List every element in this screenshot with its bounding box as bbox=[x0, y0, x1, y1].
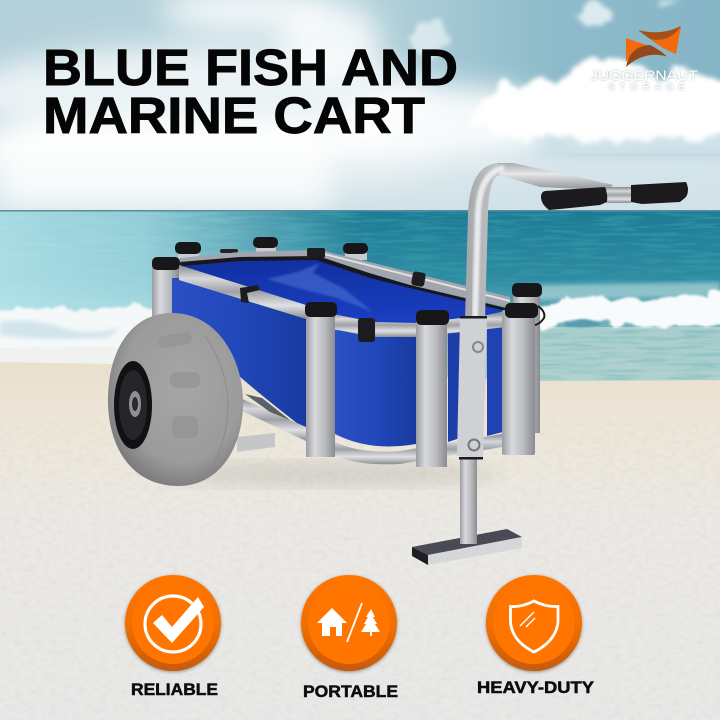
lower chassis and left foot bbox=[237, 394, 306, 452]
badge: shield icon bbox=[486, 575, 582, 671]
wheel bbox=[108, 313, 243, 486]
feature: heavy-duty bbox=[477, 575, 594, 697]
height post and T foot bbox=[412, 316, 522, 565]
badge: house and tree icon bbox=[301, 575, 397, 671]
logo wordmark: JUGGERNAUT bbox=[590, 67, 698, 83]
logo wordmark bbox=[590, 67, 698, 93]
back rim rail bbox=[180, 250, 510, 308]
badge: reliable check icon bbox=[125, 575, 221, 671]
sand bbox=[0, 362, 720, 720]
top front rail bbox=[179, 248, 506, 342]
sky with clouds bbox=[0, 0, 720, 212]
basket interior bbox=[180, 256, 510, 324]
bottom front rim bbox=[335, 434, 502, 464]
logo mark bbox=[626, 26, 681, 67]
logo: Juggernaut Storage bbox=[590, 26, 698, 93]
interior fabric fold bbox=[267, 263, 373, 312]
cart shadow on sand bbox=[160, 461, 500, 487]
front rod holders bbox=[305, 302, 544, 467]
logo wordmark: STORAGE bbox=[608, 82, 685, 93]
label: portable: PORTABLE bbox=[303, 683, 398, 701]
feature: reliable bbox=[125, 575, 221, 699]
handle and grips bbox=[465, 163, 688, 320]
title: MARINE CART bbox=[43, 87, 425, 144]
basket front fabric bbox=[172, 278, 503, 446]
label: heavy-duty: HEAVY-DUTY bbox=[477, 679, 594, 697]
title: BLUE FISH AND bbox=[43, 39, 458, 96]
product: cart bbox=[108, 163, 688, 565]
label: reliable: RELIABLE bbox=[131, 681, 218, 699]
feature: portable bbox=[301, 575, 398, 701]
sea with waves bbox=[0, 210, 720, 385]
title bbox=[43, 39, 458, 144]
rear rod holders bbox=[152, 237, 542, 433]
